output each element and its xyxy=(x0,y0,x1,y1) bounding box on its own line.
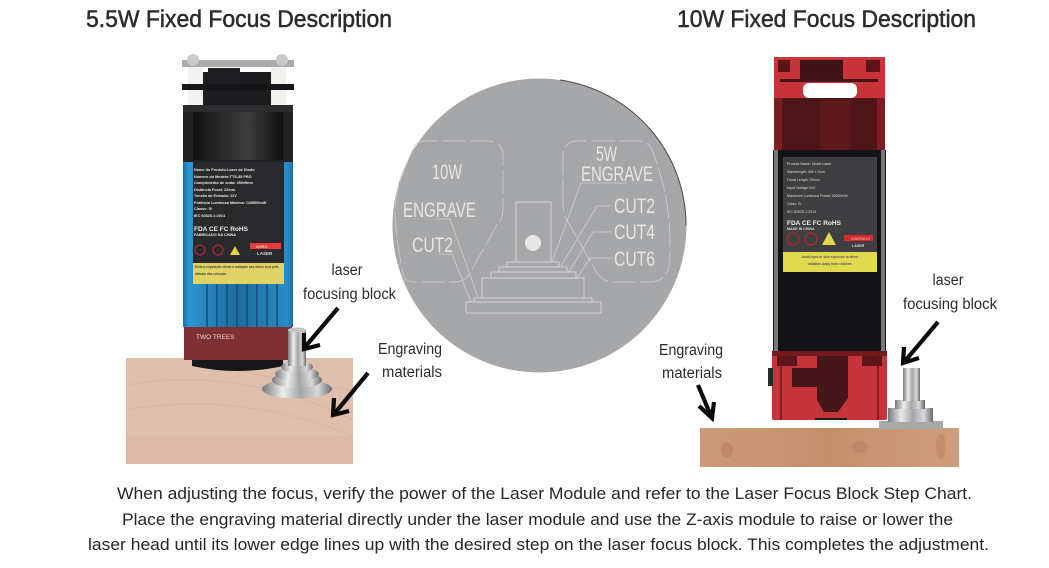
step labels: ENGRAVE xyxy=(403,199,476,222)
dashed label boxes xyxy=(395,141,670,282)
label: laser focusing block (right): laser xyxy=(932,272,964,289)
laser module body: Input Voltage:24V xyxy=(787,186,816,190)
arrow: to left focusing block xyxy=(304,308,338,349)
laser module body: LASER xyxy=(257,251,273,256)
step labels: ENGRAVE xyxy=(581,163,653,186)
laser module body: Maximum Luminous Power:10000mW xyxy=(787,194,848,198)
panel: 10W laser module photo xyxy=(700,57,959,467)
label: engraving materials (left) xyxy=(378,341,442,381)
wood block: engraving material xyxy=(126,358,353,464)
step labels: 5W xyxy=(596,143,617,166)
disc dark edge xyxy=(560,80,686,226)
laser module body: Focal Length: 30mm xyxy=(787,178,820,182)
laser module body: MADE IN CHINA xyxy=(787,227,815,231)
laser module body: WARNING xyxy=(851,236,870,241)
laser module body: Classe: IV xyxy=(194,207,213,211)
laser module body: Avoid eyes or skin exposure to direct xyxy=(802,255,859,259)
label: laser focusing block (left): focusing block xyxy=(303,286,396,303)
laser module body: Tensão de Entrada: 12V xyxy=(194,194,237,198)
step labels: CUT2 xyxy=(614,195,655,218)
laser module body: Comprimento de onda: 450±5nm xyxy=(194,181,253,185)
laser module body: Potência Luminosa Máxima: C≤5500mW xyxy=(194,201,267,205)
stepped block drawing xyxy=(466,202,601,313)
description text: Place the engraving material directly under the laser module and use the Z-axis module to raise or lower the xyxy=(122,510,953,529)
label: laser focusing block (left) xyxy=(303,262,396,303)
description text xyxy=(88,484,989,554)
disc xyxy=(392,78,686,372)
label: engraving materials (left): materials xyxy=(382,364,442,381)
arrow: to left wood block xyxy=(333,373,368,415)
title: 10W Fixed Focus Description: 10W Fixed Focus Description xyxy=(677,6,976,33)
label: engraving materials (right): Engraving xyxy=(659,342,723,359)
label: laser focusing block (right): focusing block xyxy=(903,296,997,313)
laser module body: Evite a exposição direta à radiação aos olhos ou à pele. xyxy=(195,265,279,269)
arrow: to right wood block xyxy=(698,385,714,418)
laser module body: LASER xyxy=(852,244,865,248)
label: engraving materials (left): Engraving xyxy=(378,341,442,358)
laser focusing block xyxy=(879,368,943,429)
laser module body: Product Name: Diode Laser xyxy=(787,162,832,166)
laser module body: IEC 60825-1:2014 xyxy=(787,210,816,214)
step labels: CUT4 xyxy=(614,221,655,244)
laser module body: Afastar das crianças. xyxy=(195,272,227,276)
laser focusing block xyxy=(262,328,332,398)
laser module body: Distância Focal: 22mm xyxy=(194,188,236,192)
step labels: CUT2 xyxy=(412,234,453,257)
description text: laser head until its lower edge lines up with the desired step on the laser focus block. This completes the adjustment. xyxy=(88,535,989,554)
description text: When adjusting the focus, verify the power of the Laser Module and refer to the Laser Focus Block Step Chart. xyxy=(117,484,972,503)
label: engraving materials (right) xyxy=(659,342,723,382)
laser module body: Número do Modelo:TTS-55 PRO xyxy=(194,175,252,179)
label: engraving materials (right): materials xyxy=(662,365,722,382)
step labels: 10W xyxy=(432,161,462,184)
laser module body: FDA CE FC RoHS xyxy=(787,220,842,227)
panel: focus block step chart disc xyxy=(392,78,686,372)
label: laser focusing block (right) xyxy=(903,272,997,313)
laser module body xyxy=(182,54,294,371)
leader lines xyxy=(436,183,627,302)
laser module body: FDA CE FC RoHS xyxy=(194,226,249,233)
laser module body: Wavelength: 450 ± 5nm xyxy=(787,170,825,174)
wood block: engraving material xyxy=(700,428,959,467)
laser module body: AVISO xyxy=(256,245,268,249)
step labels: CUT6 xyxy=(614,248,655,271)
laser module body: FABRICADO NA CHINA xyxy=(194,233,236,237)
label: laser focusing block (left): laser xyxy=(332,262,362,279)
laser module body: Nome do Produto:Laser de Diodo xyxy=(194,168,255,172)
hole xyxy=(525,235,541,251)
panel: 5.5W laser module photo xyxy=(126,54,353,464)
laser module body: TWO TREES xyxy=(196,334,235,341)
laser module body: IEC 60825-1:2014 xyxy=(194,214,226,218)
laser module body: Class: IV xyxy=(787,202,802,206)
title: 5.5W Fixed Focus Description: 5.5W Fixed Focus Description xyxy=(86,6,392,33)
step labels xyxy=(403,143,655,271)
arrow: to right focusing block xyxy=(903,322,938,363)
laser module body: radiation.Away from children. xyxy=(808,262,852,266)
laser module body xyxy=(768,57,887,420)
